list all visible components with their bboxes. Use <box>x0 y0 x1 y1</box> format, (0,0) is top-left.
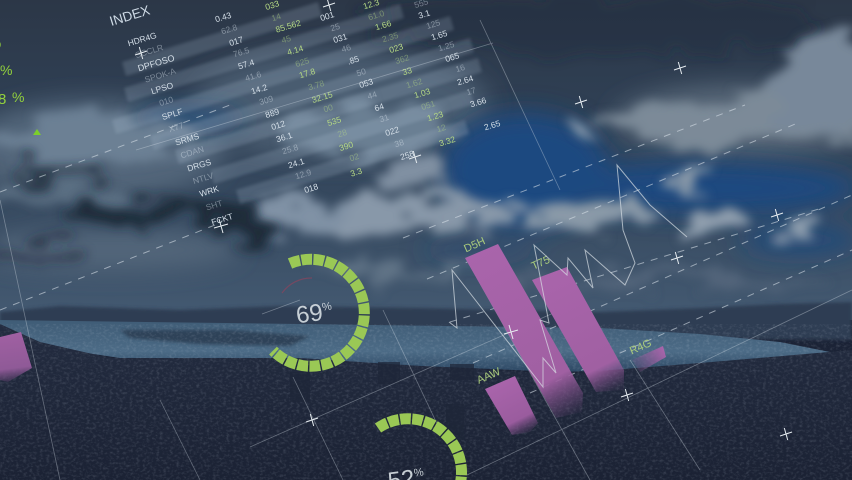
data table <box>108 0 502 227</box>
column: values 2: 28 <box>336 127 348 139</box>
column: values 2: 02 <box>348 151 360 163</box>
column: index names: DPFOSO <box>136 53 176 73</box>
column: values 2: 45 <box>280 33 292 45</box>
dark clouds <box>0 0 830 259</box>
data table rows highlight stripes <box>112 2 482 204</box>
column: index names: SPLF <box>160 106 184 122</box>
left edge green readouts: % <box>0 62 12 78</box>
column: values 2: 85.562 <box>274 17 302 35</box>
donut gauge 52% <box>378 419 462 480</box>
column: values 4: 12 <box>435 122 447 134</box>
column: index names: CDAN <box>179 144 205 160</box>
column: values 1: 57.4 <box>237 57 256 71</box>
left edge green readouts <box>0 40 41 135</box>
column: values 3: 44 <box>366 89 378 101</box>
column: values 3: 001 <box>319 9 336 23</box>
column: values 3 <box>319 9 416 162</box>
column: values 3: 46 <box>340 42 352 54</box>
column: values 5 <box>413 0 502 132</box>
column: index names: LPSO <box>150 80 175 96</box>
column: values 2: 4.14 <box>286 43 305 57</box>
column: values 5: 065 <box>444 50 461 64</box>
column: values 3: 38 <box>393 137 405 149</box>
shoreline shadow <box>120 330 310 346</box>
column: values 4: 1.66 <box>374 18 393 32</box>
column: index names: 010 <box>158 94 175 108</box>
column: values 1: 12.9 <box>294 167 313 181</box>
column: values 2: 32.15 <box>310 89 334 105</box>
column: values 2: 390 <box>338 139 355 153</box>
column: index names: WRK <box>198 183 220 199</box>
column: values 1: 0.43 <box>214 10 233 24</box>
bar labels: T75 <box>530 254 552 273</box>
zigzag line chart <box>449 165 687 387</box>
bar labels <box>462 235 654 387</box>
column: values 2: 3.3 <box>349 166 363 179</box>
column: values 5: 2.64 <box>456 73 475 87</box>
column: values 1: 41.6 <box>244 69 263 83</box>
column: values 4: 2.35 <box>381 30 400 44</box>
clouds <box>0 37 852 286</box>
column: values 4: 023 <box>388 41 405 55</box>
green triangle marker <box>33 129 41 135</box>
column: values 1: 309 <box>258 93 275 107</box>
column: index names: SPOK-A <box>143 66 177 85</box>
column: values 3: 31 <box>378 112 390 124</box>
column: values 4: 051 <box>420 98 437 112</box>
bar left edge <box>0 332 32 382</box>
column: values 5: 1.25 <box>437 39 456 53</box>
gauge value: % <box>321 300 333 314</box>
column: values 4: 3.32 <box>438 134 457 148</box>
column: values 4: 1.03 <box>413 86 432 100</box>
column: values 1 <box>214 10 320 195</box>
column: values 4: 33 <box>401 65 413 77</box>
bar T75 <box>532 267 624 392</box>
column: values 3: .85 <box>346 54 360 67</box>
column: values 5: 125 <box>425 17 442 31</box>
left edge green readouts: % <box>12 89 24 105</box>
column: index names <box>126 30 234 227</box>
column: index names: NTLV <box>192 170 215 186</box>
column: values 3: 64 <box>373 101 385 113</box>
gauge ring <box>273 259 364 366</box>
column: values 5: 16 <box>454 62 466 74</box>
bay water <box>0 320 840 372</box>
column: values 3: 022 <box>384 124 401 138</box>
column: values 1: 36.1 <box>275 130 294 144</box>
gauge value: 69 <box>294 299 325 329</box>
column: index names: HDR4G <box>126 30 158 48</box>
column: values 4: 1.23 <box>426 109 445 123</box>
sky base <box>0 0 852 320</box>
gauge inner red arc <box>282 278 312 293</box>
gauge value: % <box>413 466 425 480</box>
column: values 3: 258 <box>399 148 416 162</box>
column: values 3: 053 <box>358 76 375 90</box>
column: values 5: 2.65 <box>483 118 502 132</box>
gauge ring <box>378 419 462 480</box>
column: values 1: 76.5 <box>232 45 251 59</box>
bar D5H <box>465 244 583 418</box>
column: values 1: 24.1 <box>287 156 306 170</box>
column: index names: X77 <box>167 120 185 134</box>
column: values 2: 14 <box>270 11 282 23</box>
bar AAW <box>485 376 538 435</box>
column: values 5: 3.66 <box>469 95 488 109</box>
city texture <box>0 324 852 480</box>
column: values 5: 17 <box>465 85 477 97</box>
column: index names: SRMS <box>174 131 201 148</box>
column: index names: DRGS <box>186 157 213 174</box>
column: values 5: 3.1 <box>417 8 431 21</box>
crosshair markers <box>135 0 792 440</box>
column: values 2: 17.8 <box>298 66 317 80</box>
city towers <box>290 362 474 440</box>
column: index names: SCCLR <box>134 42 164 60</box>
column: values 4 <box>362 0 457 148</box>
column: values 2: 625 <box>294 55 311 69</box>
bar labels: D5H <box>462 235 487 255</box>
column: values 4: 362 <box>394 52 411 66</box>
dashed grid lines <box>0 105 852 393</box>
soft cloud mass <box>0 50 852 270</box>
column: values 1: 14.2 <box>250 82 269 96</box>
column: index names: FCKT <box>210 211 234 227</box>
table heading: INDEX: INDEX <box>108 2 152 29</box>
column: values 2: 535 <box>326 114 343 128</box>
column: values 1: 25.8 <box>281 142 300 156</box>
column: index names: SHT <box>205 198 224 212</box>
column: values 1: 017 <box>228 34 245 48</box>
blue sky openings <box>135 110 852 258</box>
column: values 4: 1.62 <box>405 76 424 90</box>
column: values 1: 62.8 <box>220 22 239 36</box>
column: values 2: 3.78 <box>307 78 326 92</box>
column: values 3: 50 <box>355 66 367 78</box>
column: values 3: 25 <box>329 21 341 33</box>
column: values 2: 00 <box>322 102 334 114</box>
bar R4G <box>632 346 666 372</box>
bar chart: pink bars <box>0 244 666 435</box>
donut gauge 69% <box>273 259 364 366</box>
column: values 1: 012 <box>270 118 287 132</box>
column: values 3: 031 <box>332 31 349 45</box>
column: values 2 <box>264 0 363 179</box>
distant mountains <box>0 302 852 340</box>
bar labels: AAW <box>475 366 503 387</box>
column: values 1: 018 <box>303 181 320 195</box>
column: values 4: 61.0 <box>367 8 386 22</box>
bar labels: R4G <box>628 337 654 357</box>
column: values 5: 1.65 <box>430 28 449 42</box>
city foreground <box>0 324 852 370</box>
column: values 1: 889 <box>264 106 281 120</box>
